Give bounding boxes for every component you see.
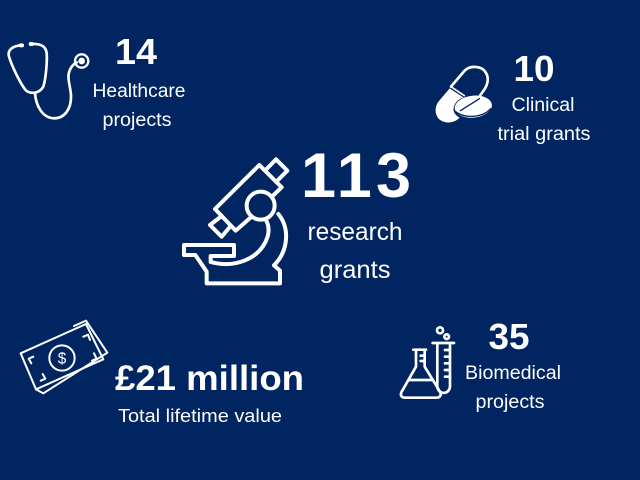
- stat: 21 million total lifetime value: Total lifetime value: [118, 406, 282, 426]
- stat: 35 biomedical projects: projects: [476, 392, 544, 413]
- stat: 10 clinical trial grants: trial grants: [498, 124, 590, 145]
- stat: 113 research grants: 113: [301, 141, 411, 211]
- stat: 113 research grants: grants: [320, 256, 390, 284]
- stat: 35 biomedical projects: Biomedical: [465, 363, 561, 384]
- stat: 21 million total lifetime value: £21 million: [115, 359, 304, 398]
- icon: banknotes: $: [58, 350, 67, 367]
- stat: 10 clinical trial grants: 10: [514, 48, 554, 89]
- stat: 21 million total lifetime value: [115, 359, 304, 426]
- icon: pills: [436, 67, 493, 122]
- stat: 14 healthcare projects: 14: [115, 31, 157, 72]
- stat: 113 research grants: [301, 141, 411, 284]
- stat: 10 clinical trial grants: [498, 48, 590, 145]
- stat: 113 research grants: research: [308, 218, 402, 246]
- icon: stethoscope: [9, 44, 88, 118]
- stat: 35 biomedical projects: [465, 316, 561, 413]
- stat: 14 healthcare projects: [92, 31, 186, 131]
- icon: flask and test tube: [401, 327, 454, 398]
- stat: 35 biomedical projects: 35: [488, 316, 530, 357]
- stat: 10 clinical trial grants: Clinical: [512, 95, 574, 116]
- stat: 14 healthcare projects: projects: [102, 110, 172, 131]
- icon: microscope: [184, 159, 287, 283]
- icon: banknotes: [21, 321, 107, 393]
- stat: 14 healthcare projects: Healthcare: [92, 81, 186, 102]
